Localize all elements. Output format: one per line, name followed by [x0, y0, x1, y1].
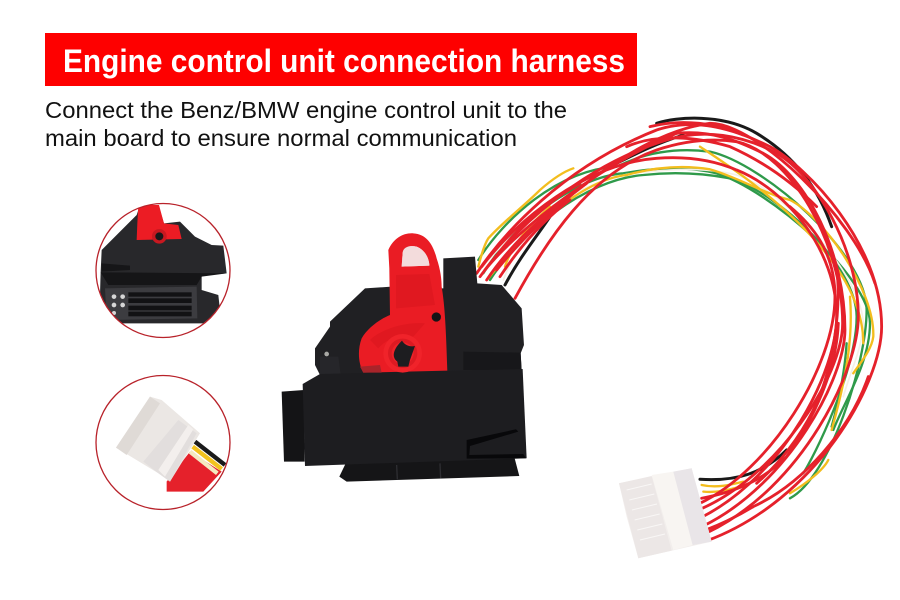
description text: main board to ensure normal communication — [45, 125, 517, 151]
inset: white plug close-up — [96, 376, 230, 510]
inset: ECU connector pins — [96, 204, 230, 338]
metal wire loop inside lever — [403, 251, 430, 267]
wire harness — [477, 118, 882, 541]
description text: Connect the Benz/BMW engine control unit to the — [45, 97, 567, 123]
yellow wires — [478, 147, 873, 493]
red lever — [359, 233, 447, 373]
red wires — [477, 123, 882, 541]
upper housing — [315, 257, 524, 375]
white plug connector — [619, 468, 712, 558]
title banner — [45, 33, 637, 86]
bottom feet — [339, 453, 519, 482]
white wires — [480, 169, 863, 397]
ECU connector — [282, 233, 527, 482]
description text — [45, 97, 567, 151]
left side tab — [282, 390, 305, 462]
green wires — [478, 150, 870, 498]
black wires — [505, 118, 832, 480]
title banner: Engine control unit connection harness — [63, 43, 625, 79]
lower housing — [303, 369, 527, 466]
